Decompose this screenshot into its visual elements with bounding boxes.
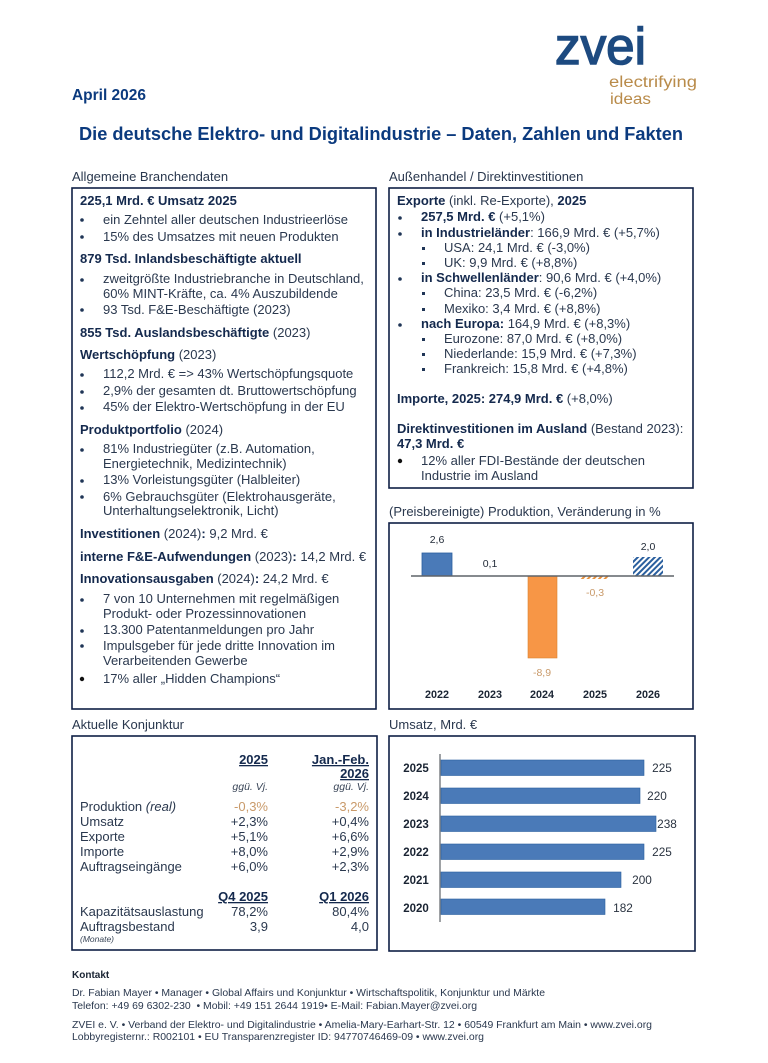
date: April 2026 <box>72 87 146 104</box>
year-over-year rows: +2,3% <box>332 859 369 874</box>
year labels: 2024 <box>530 689 554 701</box>
year-over-year rows: Auftragseingänge <box>80 859 182 874</box>
title: Die deutsche Elektro- und Digitalindustrie – Daten, Zahlen und Fakten <box>79 124 683 144</box>
exports <box>397 193 661 376</box>
contact footer: ZVEI e. V. • Verband der Elektro- und Digitalindustrie • Amelia-Mary-Earhart-Str. 12 • 60549 Frankfurt am Main • www.zvei.org <box>72 1020 652 1031</box>
bar 2020: 182 <box>613 901 633 915</box>
innovation spending: Innovationsausgaben (2024): 24,2 Mrd. € <box>80 571 329 586</box>
contact footer: Lobbyregisternr.: R002101 • EU Transparenzregister ID: 94770746469-09 • www.zvei.org <box>72 1032 484 1043</box>
quarterly rows: Q1 2026 <box>319 889 369 904</box>
direct investment: Direktinvestitionen im Ausland (Bestand 2023): <box>397 421 683 436</box>
quarterly rows: Kapazitätsauslastung <box>80 904 204 919</box>
logo: zvei electrifying ideas: electrifying <box>609 74 697 91</box>
bar 2025: 225 <box>652 761 672 775</box>
innovation spending: 7 von 10 Unternehmen mit regelmäßigen <box>103 591 339 606</box>
direct investment: Industrie im Ausland <box>421 468 538 483</box>
bar 2025: 2025 <box>403 763 429 775</box>
bar 2024: 2024 <box>403 791 429 803</box>
bar 2025 <box>403 760 672 776</box>
heading: Allgemeine Branchendaten: Allgemeine Branchendaten <box>72 169 228 184</box>
year-over-year rows: Exporte <box>80 829 125 844</box>
exports: Frankreich: 15,8 Mrd. € (+4,8%) <box>444 361 628 376</box>
exports: in Industrieländer: 166,9 Mrd. € (+5,7%) <box>421 225 660 240</box>
exports: in Schwellenländer: 90,6 Mrd. € (+4,0%) <box>421 270 661 285</box>
quarterly rows: Auftragsbestand <box>80 919 175 934</box>
bar 2020: 2020 <box>403 903 429 915</box>
product portfolio: Energietechnik, Medizintechnik) <box>103 456 287 471</box>
column headers: ggü. Vj. <box>333 781 369 793</box>
value labels: 2,6 <box>430 534 444 546</box>
year-over-year rows: +5,1% <box>231 829 268 844</box>
year-over-year rows: +6,0% <box>231 859 268 874</box>
column headers: Jan.-Feb. <box>312 752 369 767</box>
heading: Produktion: (Preisbereinigte) Produktion, Veränderung in % <box>389 504 661 519</box>
innovation spending <box>80 571 339 686</box>
year-over-year rows: +2,9% <box>332 844 369 859</box>
exports: nach Europa: 164,9 Mrd. € (+8,3%) <box>421 316 630 331</box>
contact footer: Kontakt <box>72 970 110 981</box>
column headers <box>232 752 369 793</box>
chart: sales by year <box>389 736 695 951</box>
innovation spending: 17% aller „Hidden Champions“ <box>103 671 280 686</box>
year-over-year rows: +2,3% <box>231 814 268 829</box>
innovation spending: Impulsgeber für jede dritte Innovation im <box>103 638 335 653</box>
bar 2022 <box>403 844 672 860</box>
bar 2024 <box>528 576 557 658</box>
bar 2020 <box>403 899 633 915</box>
quarterly rows: 78,2% <box>231 904 268 919</box>
exports: UK: 9,9 Mrd. € (+8,8%) <box>444 255 577 270</box>
year-over-year rows: Umsatz <box>80 814 124 829</box>
year-over-year rows: Importe <box>80 844 124 859</box>
R&D spending: interne F&E-Aufwendungen (2023): 14,2 Mrd. € <box>80 549 367 564</box>
sales: 225,1 Mrd. € Umsatz 2025 <box>80 193 237 208</box>
year labels: 2026 <box>636 689 660 701</box>
value labels: 2,0 <box>641 541 655 553</box>
contact footer: Telefon: +49 69 6302-230 • Mobil: +49 151 2644 1919• E-Mail: Fabian.Mayer@zvei.org <box>72 1001 477 1012</box>
logo: zvei electrifying ideas: ideas <box>610 91 651 108</box>
value labels: -0,3 <box>586 587 604 599</box>
bar 2022: 225 <box>652 845 672 859</box>
year labels: 2023 <box>478 689 502 701</box>
bar 2021 <box>403 872 652 888</box>
direct investment: 47,3 Mrd. € <box>397 436 464 451</box>
exports: China: 23,5 Mrd. € (-6,2%) <box>444 285 597 300</box>
heading: Umsatz: Umsatz, Mrd. € <box>389 717 478 732</box>
bar 2021: 200 <box>632 873 652 887</box>
quarterly rows: 4,0 <box>351 919 369 934</box>
direct investment: 12% aller FDI-Bestände der deutschen <box>421 453 645 468</box>
exports: 257,5 Mrd. € (+5,1%) <box>421 209 545 224</box>
innovation spending: Verarbeitenden Gewerbe <box>103 653 248 668</box>
year-over-year rows: -0,3% <box>234 799 268 814</box>
bar 2024: 220 <box>647 789 667 803</box>
value labels: -8,9 <box>533 667 551 679</box>
contact footer: Dr. Fabian Mayer • Manager • Global Affairs und Konjunktur • Wirtschaftspolitik, Konjunktur und Märkte <box>72 988 545 999</box>
bar 2021: 2021 <box>403 875 429 887</box>
value added <box>80 347 357 414</box>
sales: ein Zehntel aller deutschen Industrieerlöse <box>103 212 348 227</box>
year-over-year rows: -3,2% <box>335 799 369 814</box>
logo: zvei electrifying ideas <box>555 18 697 108</box>
year-over-year rows <box>80 799 369 874</box>
year-over-year rows: Produktion (real) <box>80 799 176 814</box>
bar 2023: 238 <box>657 817 677 831</box>
product portfolio: Unterhaltungselektronik, Licht) <box>103 503 279 518</box>
heading: Außenhandel: Außenhandel / Direktinvestitionen <box>389 169 583 184</box>
imports: Importe, 2025: 274,9 Mrd. € (+8,0%) <box>397 391 613 406</box>
quarterly rows: Q4 2025 <box>218 889 268 904</box>
bar 2022 <box>422 553 452 576</box>
column headers: ggü. Vj. <box>232 781 268 793</box>
year labels: 2025 <box>583 689 607 701</box>
value added: 112,2 Mrd. € => 43% Wertschöpfungsquote <box>103 366 353 381</box>
quarterly rows <box>80 889 369 944</box>
exports: Exporte (inkl. Re-Exporte), 2025 <box>397 193 586 208</box>
value labels: 0,1 <box>483 558 497 570</box>
chart: production change <box>389 523 693 709</box>
exports: USA: 24,1 Mrd. € (-3,0%) <box>444 240 590 255</box>
product portfolio: 81% Industriegüter (z.B. Automation, <box>103 441 315 456</box>
foreign employees: 855 Tsd. Auslandsbeschäftigte (2023) <box>80 325 310 340</box>
domestic employees: 60% MINT-Kräfte, ca. 4% Auszubildende <box>103 286 338 301</box>
innovation spending: Produkt- oder Prozessinnovationen <box>103 606 306 621</box>
product portfolio: Produktportfolio (2024) <box>80 422 223 437</box>
innovation spending: 13.300 Patentanmeldungen pro Jahr <box>103 622 315 637</box>
quarterly rows: 80,4% <box>332 904 369 919</box>
year labels: 2022 <box>425 689 449 701</box>
panel: foreign trade and direct investment <box>389 188 693 488</box>
logo: zvei electrifying ideas: zvei <box>555 18 646 76</box>
bar 2023 <box>403 816 677 832</box>
quarterly rows: (Monate) <box>80 934 114 944</box>
exports: Niederlande: 15,9 Mrd. € (+7,3%) <box>444 346 637 361</box>
year-over-year rows: +0,4% <box>332 814 369 829</box>
contact footer <box>72 970 652 1043</box>
year-over-year rows: +6,6% <box>332 829 369 844</box>
bar 2024 <box>403 788 667 804</box>
bar 2022: 2022 <box>403 847 429 859</box>
heading: Aktuelle Konjunktur: Aktuelle Konjunktur <box>72 717 185 732</box>
exports: Mexiko: 3,4 Mrd. € (+8,8%) <box>444 301 600 316</box>
investments: Investitionen (2024): 9,2 Mrd. € <box>80 526 269 541</box>
product portfolio <box>80 422 336 518</box>
quarterly rows: 3,9 <box>250 919 268 934</box>
column headers: 2025 <box>239 752 268 767</box>
value added: 45% der Elektro-Wertschöpfung in der EU <box>103 399 345 414</box>
bar 2026 <box>633 557 663 576</box>
sales <box>80 193 348 244</box>
bar 2025 <box>580 576 609 579</box>
value added: Wertschöpfung (2023) <box>80 347 216 362</box>
panel: economic indicators table <box>72 736 377 950</box>
direct investment <box>397 421 683 483</box>
bar 2023: 2023 <box>403 819 429 831</box>
value added: 2,9% der gesamten dt. Bruttowertschöpfung <box>103 383 357 398</box>
sales: 15% des Umsatzes mit neuen Produkten <box>103 229 339 244</box>
exports: Eurozone: 87,0 Mrd. € (+8,0%) <box>444 331 622 346</box>
domestic employees: zweitgrößte Industriebranche in Deutschland, <box>103 271 364 286</box>
value labels <box>430 534 655 679</box>
panel: general industry data <box>72 188 376 709</box>
product portfolio: 13% Vorleistungsgüter (Halbleiter) <box>103 472 300 487</box>
domestic employees <box>80 251 364 317</box>
domestic employees: 93 Tsd. F&E-Beschäftigte (2023) <box>103 302 291 317</box>
year-over-year rows: +8,0% <box>231 844 268 859</box>
column headers: 2026 <box>340 766 369 781</box>
product portfolio: 6% Gebrauchsgüter (Elektrohausgeräte, <box>103 489 336 504</box>
year labels <box>425 689 660 701</box>
domestic employees: 879 Tsd. Inlandsbeschäftigte aktuell <box>80 251 302 266</box>
